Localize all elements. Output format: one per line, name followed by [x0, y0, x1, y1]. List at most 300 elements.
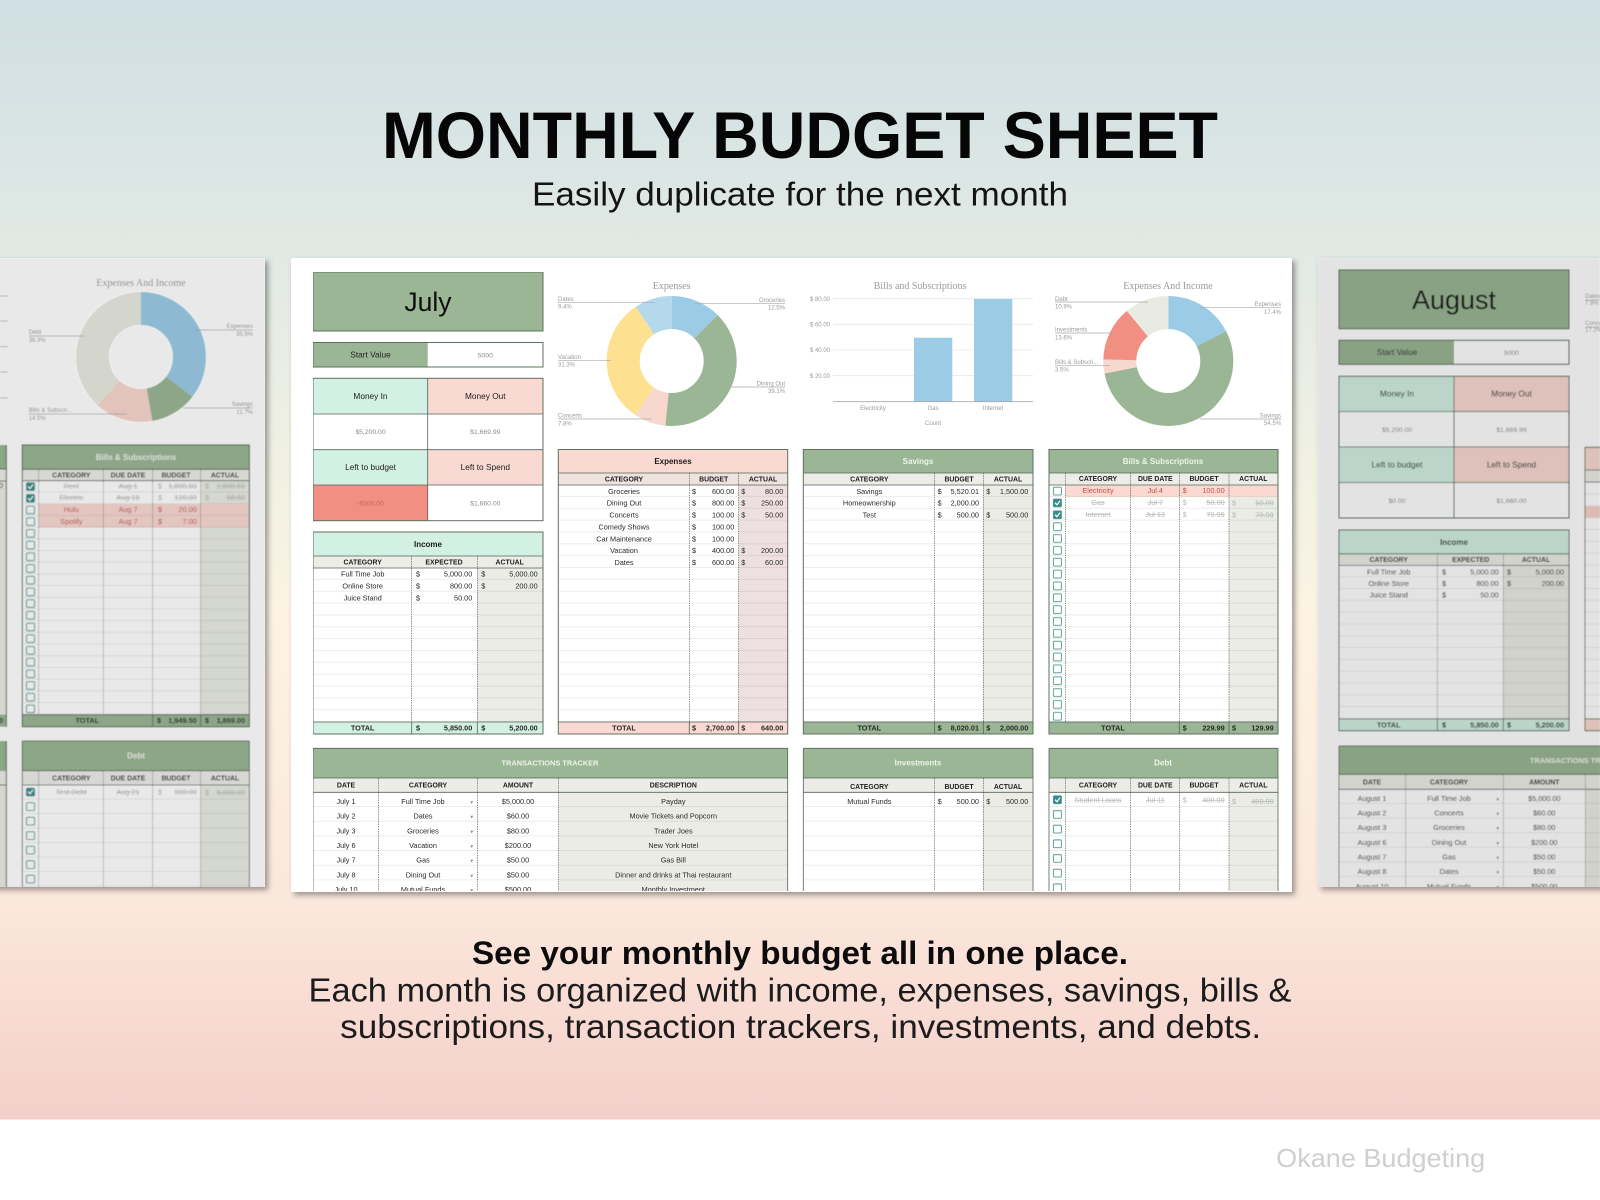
table: transactions tracker: Trader Joes: [654, 826, 693, 835]
table: savings: ACTUAL: [994, 477, 1022, 484]
table: debt (June): $: [158, 787, 162, 796]
chart: expenses and income donut (June): Expenses: [227, 324, 253, 330]
table: bills and subscriptions (June): Aug 1: [118, 482, 138, 491]
table: transactions tracker: Dates: [413, 812, 433, 821]
table: income: EXPECTED: [425, 560, 463, 567]
table: bills and subscriptions: 229.99: [1202, 724, 1225, 733]
table: expenses: Dates: [614, 558, 634, 567]
table: transactions tracker (August): ▾: [1496, 841, 1499, 847]
chart: expenses and income donut: 3.5%: [1055, 368, 1069, 374]
chart: expenses and income donut: [1055, 281, 1282, 427]
table: expenses: $: [741, 546, 745, 555]
table: transactions tracker: Payday: [661, 797, 686, 806]
chart: expenses donut: Expenses: [653, 281, 691, 292]
table: expenses: 60.00: [765, 558, 783, 567]
table: expenses: 100.00: [712, 522, 734, 531]
table: transactions tracker (August): $60.00: [1533, 809, 1555, 818]
table: transactions tracker (August): AMOUNT: [1529, 780, 1560, 786]
table: bills and subscriptions (June): $: [158, 482, 162, 491]
table: investments: ACTUAL: [994, 784, 1022, 791]
table: savings: $: [986, 511, 990, 520]
table: investments: CATEGORY: [850, 784, 889, 791]
table: transactions tracker: Mutual Funds: [401, 885, 445, 894]
chart: expenses donut: Concerts: [558, 414, 582, 420]
table: transactions tracker: Dinner and drinks at Thai restaurant: [615, 870, 731, 879]
start value row (August): Start Value: [1377, 347, 1418, 357]
table: savings: 500.00: [957, 511, 979, 520]
table: transactions tracker: $5,000.00: [502, 797, 534, 806]
table: bills and subscriptions: $: [1232, 724, 1236, 733]
table: expenses: 2,700.00: [706, 724, 734, 733]
table: bills and subscriptions: Jul 13: [1146, 510, 1165, 519]
table: income: Online Store: [342, 582, 383, 590]
table: transactions tracker: ▾: [470, 844, 473, 850]
table: bills and subscriptions (June): 66.50: [227, 493, 245, 502]
table: savings: Homeownership: [843, 499, 896, 508]
table: transactions tracker (August): $500.00: [1531, 882, 1557, 891]
table: income (August): Juice Stand: [1370, 591, 1408, 600]
description text: [308, 935, 1292, 1045]
table: transactions tracker (August): ▾: [1496, 885, 1499, 891]
table: debt (June): 5,000.00: [217, 788, 245, 797]
chart: expenses donut: 31.3%: [558, 362, 576, 368]
table: investments: Mutual Funds: [847, 797, 892, 806]
table: bills and subscriptions: 100.00: [1202, 486, 1225, 495]
table: debt (June): Test Debt: [56, 787, 87, 796]
table: transactions tracker: $60.00: [507, 812, 529, 821]
summary grid (August): Money In: [1380, 388, 1414, 398]
table: income (August): CATEGORY: [1370, 557, 1408, 564]
chart: expenses donut: Groceries: [759, 298, 785, 304]
table: transactions tracker (August): CATEGORY: [1430, 780, 1469, 786]
table: expenses: Comedy Shows: [598, 522, 650, 531]
summary grid (August): $5,200.00: [1382, 427, 1412, 434]
table: bills and subscriptions (June): $: [158, 505, 162, 514]
table: debt: 400.00: [1251, 797, 1274, 806]
table: bills and subscriptions: 129.99: [1251, 724, 1274, 733]
table: expenses: 640.00: [761, 724, 783, 733]
table: bills and subscriptions: $: [1183, 510, 1187, 519]
chart: expenses and income donut: 54.5%: [1264, 421, 1282, 427]
chart: expenses and income donut: Savings: [1260, 414, 1281, 420]
table: savings: $: [986, 724, 990, 733]
table: investments: $: [938, 797, 942, 806]
table: income (August): 5,850.00: [1470, 720, 1499, 730]
table: expenses: $: [741, 558, 745, 567]
table: bills and subscriptions (June): 1,949.50: [168, 716, 197, 725]
table: transactions tracker (August): Groceries: [1433, 823, 1465, 832]
table: bills and subscriptions: $: [1183, 498, 1187, 507]
table: debt (June): [22, 741, 249, 891]
table: investments: [803, 748, 1033, 891]
chart: expenses and income donut: Bills & Subscri...: [1055, 360, 1099, 366]
chart: bills and subscriptions bars: Internet: [983, 406, 1004, 412]
table: transactions tracker (August): August 8: [1358, 867, 1386, 876]
table: transactions tracker (August): ▾: [1496, 812, 1499, 818]
chart: expenses donut: 7.8%: [558, 422, 572, 428]
table: income: $: [416, 582, 420, 590]
table: income (August): 200.00: [1542, 579, 1564, 588]
partial expense chart labels and table (August): [1585, 294, 1600, 731]
table: income: ACTUAL: [496, 560, 524, 567]
table: income (August): ACTUAL: [1522, 557, 1550, 564]
table: transactions tracker: ▾: [470, 859, 473, 865]
table: transactions tracker: $80.00: [507, 826, 529, 835]
table: transactions tracker (August): $5,000.00: [1528, 794, 1561, 803]
chart: expenses and income donut: 13.6%: [1055, 336, 1073, 342]
table: bills and subscriptions: ACTUAL: [1239, 476, 1267, 483]
table: transactions tracker: $50.00: [507, 870, 529, 879]
title: MONTHLY BUDGET SHEET: [382, 98, 1218, 172]
start value row: [313, 342, 543, 367]
table: savings: 1,500.00: [1000, 487, 1028, 496]
summary grid: money in and out: Money Out: [465, 391, 506, 401]
chart: expenses and income donut (June): 38.3%: [29, 338, 46, 344]
table: bills and subscriptions (June): 7.00: [182, 517, 197, 526]
table: expenses: Vacation: [610, 546, 638, 555]
table: savings: 2,000.00: [1000, 724, 1028, 733]
table: income: 200.00: [515, 582, 538, 590]
table: savings: [803, 450, 1033, 734]
table: expenses: $: [692, 522, 696, 531]
summary grid: money in and out: -$500.00: [357, 500, 384, 508]
table: transactions tracker (August): August 1: [1358, 794, 1386, 803]
table: transactions tracker: July 7: [336, 856, 356, 865]
table: bills and subscriptions: Bills & Subscriptions: [1123, 457, 1204, 466]
table: income (August): $: [1442, 720, 1446, 730]
table: debt (June): 900.00: [174, 787, 197, 796]
table: income (August): 5,000.00: [1470, 567, 1499, 576]
month header: August: [1339, 270, 1569, 329]
chart: bills and subscriptions bars: $ 60.00: [810, 322, 831, 328]
table: transactions tracker (August): ▾: [1496, 797, 1499, 803]
table: income (August): $: [1442, 579, 1446, 588]
summary grid: money in and out: Left to budget: [345, 462, 397, 472]
summary grid: money in and out: [313, 378, 543, 521]
table: savings: TOTAL: [857, 724, 882, 733]
table: income: [313, 532, 543, 734]
summary grid (August): $0.00: [1388, 498, 1406, 505]
table: transactions tracker (August): August 3: [1358, 823, 1386, 832]
table: bills and subscriptions: Internet: [1086, 510, 1110, 519]
summary grid: money in and out: Left to Spend: [461, 462, 510, 472]
table: transactions tracker: July 2: [336, 812, 356, 821]
month header: July: [313, 272, 543, 331]
table: savings: $: [938, 499, 942, 508]
table: bills and subscriptions (June): Rent: [64, 482, 79, 491]
table: transactions tracker (August): $200.00: [1531, 838, 1557, 847]
table: bills and subscriptions (June): DUE DATE: [111, 472, 146, 479]
table: bills and subscriptions: BUDGET: [1189, 476, 1219, 483]
chart: expenses and income donut: Debt: [1055, 297, 1068, 303]
table: income: $: [481, 724, 485, 733]
table: income: 800.00: [450, 582, 472, 590]
table: transactions tracker (August): Full Time Job: [1427, 794, 1471, 803]
chart: bills and subscriptions bars: Count: [925, 421, 941, 427]
table: debt: 400.00: [1202, 796, 1225, 805]
table: investments: 500.00: [1006, 797, 1028, 806]
table: income (August): 800.00: [1476, 579, 1499, 588]
table: savings: BUDGET: [944, 477, 974, 484]
month header: July: July: [404, 287, 452, 317]
table: bills and subscriptions: TOTAL: [1101, 724, 1125, 733]
table: expenses: $: [741, 487, 745, 496]
table: income: Juice Stand: [344, 593, 382, 602]
table: debt: CATEGORY: [1079, 782, 1118, 790]
table: debt: Debt: [1154, 759, 1172, 768]
table: income (August): $: [1442, 591, 1446, 600]
chart: expenses donut: [558, 281, 786, 428]
table: bills and subscriptions (June): Aug 7: [118, 517, 138, 526]
panel: August sheet (right, dimmed): [1318, 258, 1600, 891]
chart: expenses donut: 9.4%: [558, 304, 572, 310]
chart: expenses and income donut (June): Expenses And Income: [96, 278, 186, 289]
table: transactions tracker: [313, 748, 788, 894]
table: transactions tracker: Movie Tickets and Popcorn: [629, 812, 717, 821]
chart: expenses and income donut: 10.9%: [1055, 304, 1073, 310]
table: investments: Investments: [895, 759, 942, 768]
table: transactions tracker: July 6: [336, 841, 356, 850]
panel: June sheet (left, dimmed): [0, 258, 265, 891]
chart: bills and subscriptions bars: $ 20.00: [810, 374, 831, 380]
table: bills and subscriptions: 79.99: [1255, 510, 1274, 520]
chart: expenses and income donut (June): 11.7%: [236, 410, 254, 416]
table: transactions tracker: DESCRIPTION: [650, 782, 697, 790]
table: income: CATEGORY: [344, 560, 382, 567]
table: debt: DUE DATE: [1138, 782, 1173, 790]
table: transactions tracker: July 3: [336, 826, 356, 835]
table: debt (June): $: [205, 788, 209, 797]
table: income: $: [481, 570, 485, 579]
table: bills and subscriptions: $: [1183, 724, 1187, 733]
table: transactions tracker: ▾: [470, 888, 473, 894]
table: debt: Student Loans: [1074, 796, 1122, 805]
table: debt (June): DUE DATE: [111, 776, 146, 782]
chart: bills and subscriptions bars: Electricity: [860, 406, 886, 412]
table: income (August): Income: [1440, 538, 1469, 547]
table: bills and subscriptions: $: [1232, 498, 1236, 508]
table: transactions tracker: Groceries: [407, 826, 439, 835]
table: bills and subscriptions: 50.00: [1255, 498, 1274, 508]
table: income: $: [416, 724, 420, 733]
table: bills and subscriptions (June): 1,800.50: [168, 482, 197, 491]
summary grid: money in and out: $5,200.00: [355, 429, 386, 436]
table: expenses: 100.00: [712, 511, 734, 520]
table: bills and subscriptions (June): $: [158, 493, 162, 502]
chart: bills and subscriptions bars: $ 40.00: [810, 348, 831, 354]
summary grid (August): Left to Spend: [1487, 460, 1537, 470]
table: income (August): 50.00: [1480, 591, 1499, 600]
table: expenses: Expenses: [654, 457, 692, 466]
table: bills and subscriptions: Gas: [1091, 498, 1105, 507]
table: bills and subscriptions (June): Electric: [59, 493, 84, 502]
start value row (August): [1339, 340, 1569, 364]
table: debt (June): ACTUAL: [211, 776, 239, 782]
table: transactions tracker: ▾: [470, 815, 473, 821]
table: debt: BUDGET: [1189, 782, 1219, 790]
table: bills and subscriptions: $: [1232, 510, 1236, 520]
table: transactions tracker: AMOUNT: [503, 782, 534, 790]
table: income: 5,000.00: [444, 570, 472, 579]
chart: expenses and income donut: Investments: [1055, 328, 1087, 334]
table: bills and subscriptions (June): $: [205, 716, 209, 725]
table: transactions tracker (August): ▾: [1496, 855, 1499, 861]
table: income: Income: [414, 540, 443, 549]
table: transactions tracker (August): Gas: [1442, 852, 1456, 861]
table: savings: 500.00: [1006, 511, 1028, 520]
table: debt: Jul 11: [1146, 796, 1165, 805]
table: expenses: $: [741, 724, 745, 733]
table: transactions tracker (August): Dining Out: [1432, 838, 1466, 847]
table: expenses: $: [692, 546, 696, 555]
table: expenses: $: [692, 558, 696, 567]
table: expenses: Concerts: [609, 511, 639, 520]
table: income (August): $: [1507, 720, 1511, 730]
table: expenses: $: [741, 499, 745, 508]
summary grid: money in and out: $1,669.99: [470, 429, 501, 436]
footer brand: Okane Budgeting: [1276, 1143, 1485, 1173]
description text: subscriptions, transaction trackers, investments, and debts.: [340, 1008, 1261, 1045]
table: expenses: 200.00: [761, 546, 783, 555]
description text: Each month is organized with income, expenses, savings, bills &: [308, 972, 1292, 1008]
table: savings: Test: [863, 511, 876, 520]
table: expenses: TOTAL: [612, 724, 636, 733]
table: debt: ACTUAL: [1239, 782, 1267, 790]
table: income: TOTAL: [351, 724, 375, 733]
table: investments: $: [986, 797, 990, 806]
table: investments: BUDGET: [944, 784, 974, 791]
table: bills and subscriptions (June): $: [205, 493, 209, 502]
table: transactions tracker: July 1: [336, 797, 356, 806]
table: income (August): TOTAL: [1377, 720, 1401, 730]
table: transactions tracker (August): Concerts: [1434, 809, 1464, 818]
table: income: $: [416, 570, 420, 579]
chart: expenses and income donut: 17.4%: [1264, 310, 1282, 316]
table: transactions tracker: July 8: [336, 870, 356, 879]
table: bills and subscriptions (June): CATEGORY: [52, 472, 91, 479]
chart: expenses and income donut (June): Savings: [232, 402, 253, 408]
chart: expenses and income donut (June): Bills & Subscri...: [29, 408, 72, 414]
table: transactions tracker: Gas Bill: [661, 856, 686, 865]
table: debt (June): CATEGORY: [52, 776, 91, 782]
summary grid (August): $1,669.99: [1496, 427, 1527, 434]
table: income (August): 5,000.00: [1536, 567, 1564, 576]
table: income (August): $: [1507, 579, 1511, 588]
subtitle: Easily duplicate for the next month: [532, 176, 1068, 212]
summary grid (August): [1339, 376, 1569, 518]
table: savings: CATEGORY: [850, 477, 889, 484]
table: expenses: $: [741, 511, 745, 520]
table: bills and subscriptions: 79.99: [1206, 510, 1225, 519]
table: transactions tracker: ▾: [470, 873, 473, 879]
table: debt: [1049, 748, 1278, 891]
summary grid (August): Money Out: [1491, 388, 1532, 398]
table: bills and subscriptions (June): Hulu: [64, 505, 79, 514]
table: transactions tracker: CATEGORY: [409, 782, 448, 790]
table: expenses: $: [692, 499, 696, 508]
table: expenses: BUDGET: [699, 477, 729, 484]
table: expenses: 50.00: [765, 511, 783, 520]
table: transactions tracker (August): Dates: [1439, 867, 1459, 876]
table: bills and subscriptions: DUE DATE: [1138, 476, 1173, 483]
table: bills and subscriptions (June): 1,800.50: [217, 482, 245, 491]
table: bills and subscriptions (June): [22, 445, 249, 727]
table: income (August): Online Store: [1368, 579, 1409, 588]
table: expenses: 800.00: [712, 499, 734, 508]
table: debt: $: [1183, 796, 1187, 805]
chart: expenses and income donut (June): Debt: [29, 330, 42, 336]
table: transactions tracker (August): $50.00: [1533, 867, 1555, 876]
table: expenses: 600.00: [712, 487, 734, 496]
table: expenses: 400.00: [712, 546, 734, 555]
table: transactions tracker: $200.00: [505, 841, 531, 850]
chart: expenses and income donut (June): [29, 278, 254, 422]
table: transactions tracker (August): ▾: [1496, 870, 1499, 876]
table: bills and subscriptions: Jul 4: [1148, 486, 1163, 495]
table: transactions tracker: Monthly Investment: [642, 885, 705, 894]
table: transactions tracker: Vacation: [409, 841, 437, 850]
table: income (August): 5,200.00: [1536, 720, 1564, 730]
table: transactions tracker (August): $80.00: [1533, 823, 1555, 832]
chart: expenses and income donut (June): 14.5%: [29, 416, 46, 422]
partial expense chart labels and table (August): 7.8%: [1585, 301, 1599, 307]
summary grid: money in and out: Money In: [353, 391, 388, 401]
table: savings: Savings: [903, 457, 934, 466]
table: expenses: CATEGORY: [605, 477, 644, 484]
table: transactions tracker: Gas: [416, 856, 430, 865]
table: transactions tracker (August): Mutual Funds: [1427, 882, 1471, 891]
table: bills and subscriptions: Jul 7: [1148, 498, 1163, 507]
table: expenses: Dining Out: [607, 499, 641, 508]
table: expenses: 80.00: [765, 487, 783, 496]
table: expenses: Car Maintenance: [596, 534, 652, 543]
table: savings: 5,520.01: [951, 487, 979, 496]
table: bills and subscriptions: Electricity: [1082, 486, 1114, 495]
table: savings: $: [986, 487, 990, 496]
table: expenses: [558, 450, 788, 734]
month header: August: August: [1412, 285, 1497, 315]
table: income (August): [1339, 530, 1569, 731]
table: bills and subscriptions (June): Aug 7: [118, 505, 138, 514]
table: transactions tracker (August): August 6: [1358, 838, 1386, 847]
chart: expenses donut: 39.1%: [768, 389, 786, 395]
table: savings: $: [938, 487, 942, 496]
table: debt: $: [1232, 797, 1236, 806]
chart: expenses and income donut (June): 35.5%: [236, 332, 254, 338]
table: expenses: Groceries: [608, 487, 640, 496]
table: bills and subscriptions (June): Aug 15: [116, 493, 140, 502]
table: savings: 2,000.00: [951, 499, 979, 508]
table: income: $: [416, 593, 420, 602]
table: bills and subscriptions (June): ACTUAL: [211, 472, 239, 479]
table: transactions tracker (August): $50.00: [1533, 852, 1555, 861]
table: transactions tracker: DATE: [337, 782, 356, 790]
table: bills and subscriptions (June): $: [157, 716, 161, 725]
partial previous chart gridlines: [0, 296, 8, 398]
table: bills and subscriptions: CATEGORY: [1079, 476, 1118, 483]
table: bills and subscriptions: 50.00: [1206, 498, 1225, 507]
table: debt (June): Debt: [127, 752, 145, 760]
table: bills and subscriptions (June): $: [158, 517, 162, 526]
summary grid (August): Left to budget: [1372, 460, 1423, 470]
summary grid (August): $1,660.00: [1496, 498, 1527, 505]
summary grid: money in and out: $1,660.00: [470, 500, 501, 508]
start value row: Start Value: [350, 350, 391, 360]
table: income: $: [481, 582, 485, 590]
chart: expenses donut: Vacation: [558, 355, 581, 361]
table: income (August): $: [1507, 567, 1511, 576]
table: income (August): EXPECTED: [1452, 557, 1489, 564]
